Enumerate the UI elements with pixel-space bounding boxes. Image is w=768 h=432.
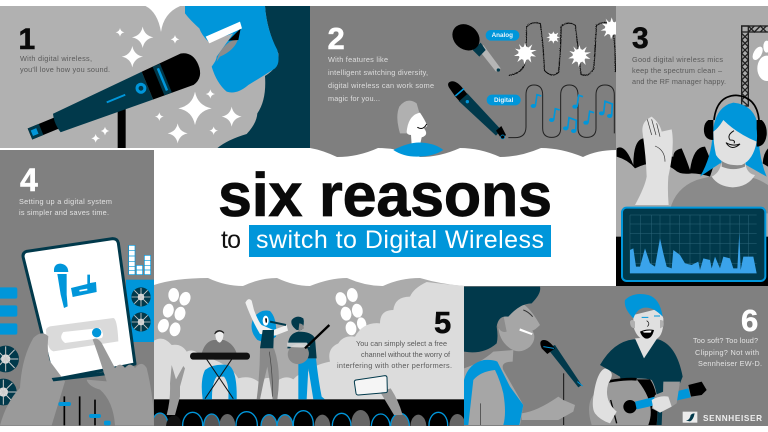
number 2: 2	[328, 21, 345, 56]
digital pill	[487, 95, 521, 105]
text 3: keep the spectrum clean –	[632, 66, 723, 75]
text 2: intelligent switching diversity,	[328, 68, 428, 77]
number 6: 6	[741, 303, 758, 338]
title block	[218, 161, 552, 257]
headphones	[704, 95, 767, 147]
panel 5: stage	[152, 278, 465, 432]
text 1: you'll love how you sound.	[20, 65, 110, 74]
dark teal shoulder	[217, 6, 310, 149]
listening man	[393, 101, 443, 157]
woman face and neck	[712, 120, 758, 188]
singer	[245, 299, 288, 399]
woman hair	[700, 103, 767, 177]
logo	[683, 412, 697, 423]
text 6	[693, 336, 762, 368]
crowd silhouettes	[617, 138, 713, 177]
guitarist arms	[593, 368, 617, 423]
blue speaker block	[126, 280, 154, 342]
text 4	[19, 197, 112, 217]
top notch	[146, 6, 180, 32]
panel 1: sound	[0, 4, 310, 150]
text 5: You can simply select a free	[356, 339, 447, 348]
text 6: Too soft? Too loud?	[693, 336, 758, 345]
right hand	[87, 339, 154, 425]
equaliser	[129, 245, 151, 275]
analog pill: Analog	[492, 32, 513, 39]
mic stand and mic	[540, 340, 583, 425]
on-screen slider	[46, 318, 118, 351]
text 1	[20, 56, 110, 74]
panel 6: singer and guitarist	[464, 286, 768, 426]
woman hand	[522, 397, 575, 420]
guitarist shirt	[600, 339, 683, 425]
phone hand	[354, 376, 403, 415]
black desk	[610, 237, 768, 286]
woman face	[497, 304, 540, 351]
text 2: With features like	[328, 55, 388, 64]
stage lights right	[334, 287, 367, 336]
number 4: 4	[20, 162, 38, 198]
paw white light	[752, 40, 768, 81]
stage lights left	[156, 288, 192, 337]
wordmark: SENNHEISER	[703, 414, 762, 423]
black stage	[154, 399, 464, 426]
panel 2: magic	[310, 6, 623, 157]
word: to: to	[221, 226, 241, 254]
analog mic	[452, 24, 500, 72]
text 4: Setting up a digital system	[19, 197, 112, 206]
text 1: With digital wireless,	[20, 54, 92, 63]
analog signal	[508, 22, 615, 75]
text 2: digital wireless can work some	[328, 81, 434, 90]
spectrum monitor	[622, 208, 765, 281]
number 3: 3	[632, 22, 649, 55]
text 3: and the RF manager happy.	[632, 77, 726, 86]
subtitle highlight: switch to Digital Wireless	[256, 226, 544, 254]
text 4: is simpler and saves time.	[19, 208, 109, 217]
device icons	[54, 264, 97, 308]
digital pill: Digital	[494, 97, 514, 104]
text 2: magic for you...	[328, 94, 380, 103]
waving hand	[635, 117, 673, 205]
digital signal	[508, 85, 614, 138]
music notes	[531, 95, 612, 133]
number 1: 1	[18, 23, 35, 56]
left hand	[0, 333, 65, 425]
raised hand peace sign	[167, 365, 185, 415]
text 2	[328, 55, 434, 103]
panel 3: spectrum	[610, 6, 768, 286]
text 5: channel without the worry of	[361, 350, 451, 359]
analog pill	[486, 30, 519, 41]
microphone	[28, 53, 200, 140]
title: six reasons: six reasons	[218, 161, 552, 229]
text 3: Good digital wireless mics	[632, 55, 723, 64]
left speakers	[0, 346, 19, 405]
lighting truss	[742, 26, 768, 106]
audience	[152, 410, 465, 432]
text 5	[337, 339, 452, 370]
text 5: interfering with other performers.	[337, 361, 452, 370]
light clouds	[154, 282, 465, 401]
text 6: Sennheiser EW-D.	[698, 359, 762, 368]
woman body and dress	[464, 350, 523, 425]
tablet lower edge	[52, 372, 105, 381]
faders	[58, 396, 111, 425]
text 3	[632, 55, 726, 86]
guitarist hair	[625, 294, 663, 318]
sparkles	[91, 27, 242, 143]
mic stand	[118, 108, 126, 150]
keyboard player	[190, 330, 250, 399]
mouth	[206, 22, 242, 62]
singer face	[185, 6, 279, 92]
woman body	[670, 175, 768, 213]
starbursts	[514, 17, 623, 67]
guitarist	[285, 317, 329, 399]
woman hair	[464, 287, 540, 352]
blue buttons	[0, 287, 17, 335]
guitar	[589, 378, 707, 425]
number 5: 5	[434, 305, 451, 340]
tablet	[23, 239, 135, 380]
digital mic	[448, 81, 506, 139]
panel 4: setup	[0, 150, 154, 426]
text 6: Clipping? Not with	[695, 348, 759, 357]
guitarist neck and face	[630, 308, 664, 358]
